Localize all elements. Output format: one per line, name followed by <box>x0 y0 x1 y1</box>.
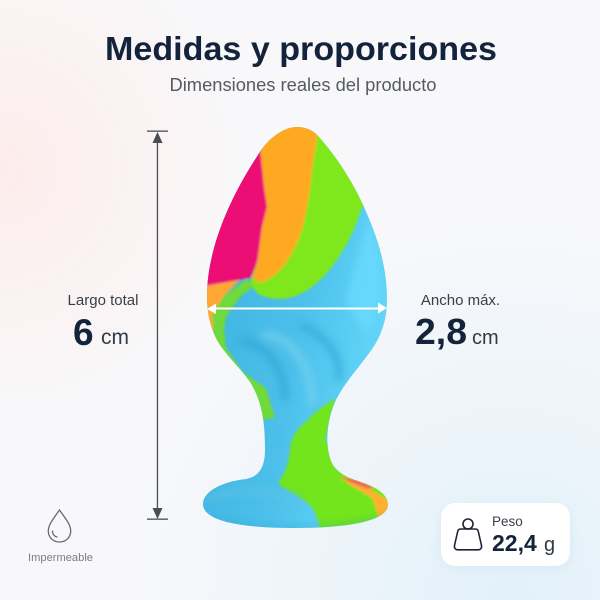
title: Medidas y proporciones <box>105 30 497 67</box>
product: pink base edge <box>340 477 375 489</box>
product: left orange <box>207 278 241 334</box>
product: blue highlights <box>205 215 385 529</box>
height arrow <box>147 130 168 520</box>
label: ancho max <box>415 292 500 352</box>
text: peso: Peso <box>492 514 523 529</box>
product: orange base edge <box>340 478 388 517</box>
label: largo total: Largo total <box>68 292 138 309</box>
product: blue base <box>203 127 388 528</box>
label: impermeable: Impermeable <box>28 552 93 564</box>
label: largo total <box>68 292 138 353</box>
icon: water drop <box>48 510 71 542</box>
label: ancho max: cm <box>472 327 499 349</box>
label: ancho max: Ancho máx. <box>421 292 500 309</box>
text: weight value: g <box>544 534 555 556</box>
weight card <box>441 503 570 566</box>
product: left green <box>212 279 275 420</box>
icon: weight <box>454 519 482 550</box>
subtitle: Dimensiones reales del producto <box>170 75 436 95</box>
label: largo total: 6 <box>73 312 94 353</box>
product illustration <box>203 127 388 528</box>
text: weight value: 22,4 <box>492 530 537 556</box>
label: ancho max: 2,8 <box>415 311 467 352</box>
width arrow <box>207 302 387 314</box>
product: green lower swirl <box>278 398 395 530</box>
product: pink left <box>200 147 267 286</box>
product: green upper swirl <box>250 130 372 299</box>
card background <box>441 503 570 566</box>
product: orange centre <box>252 122 318 283</box>
label: largo total: cm <box>101 326 129 349</box>
